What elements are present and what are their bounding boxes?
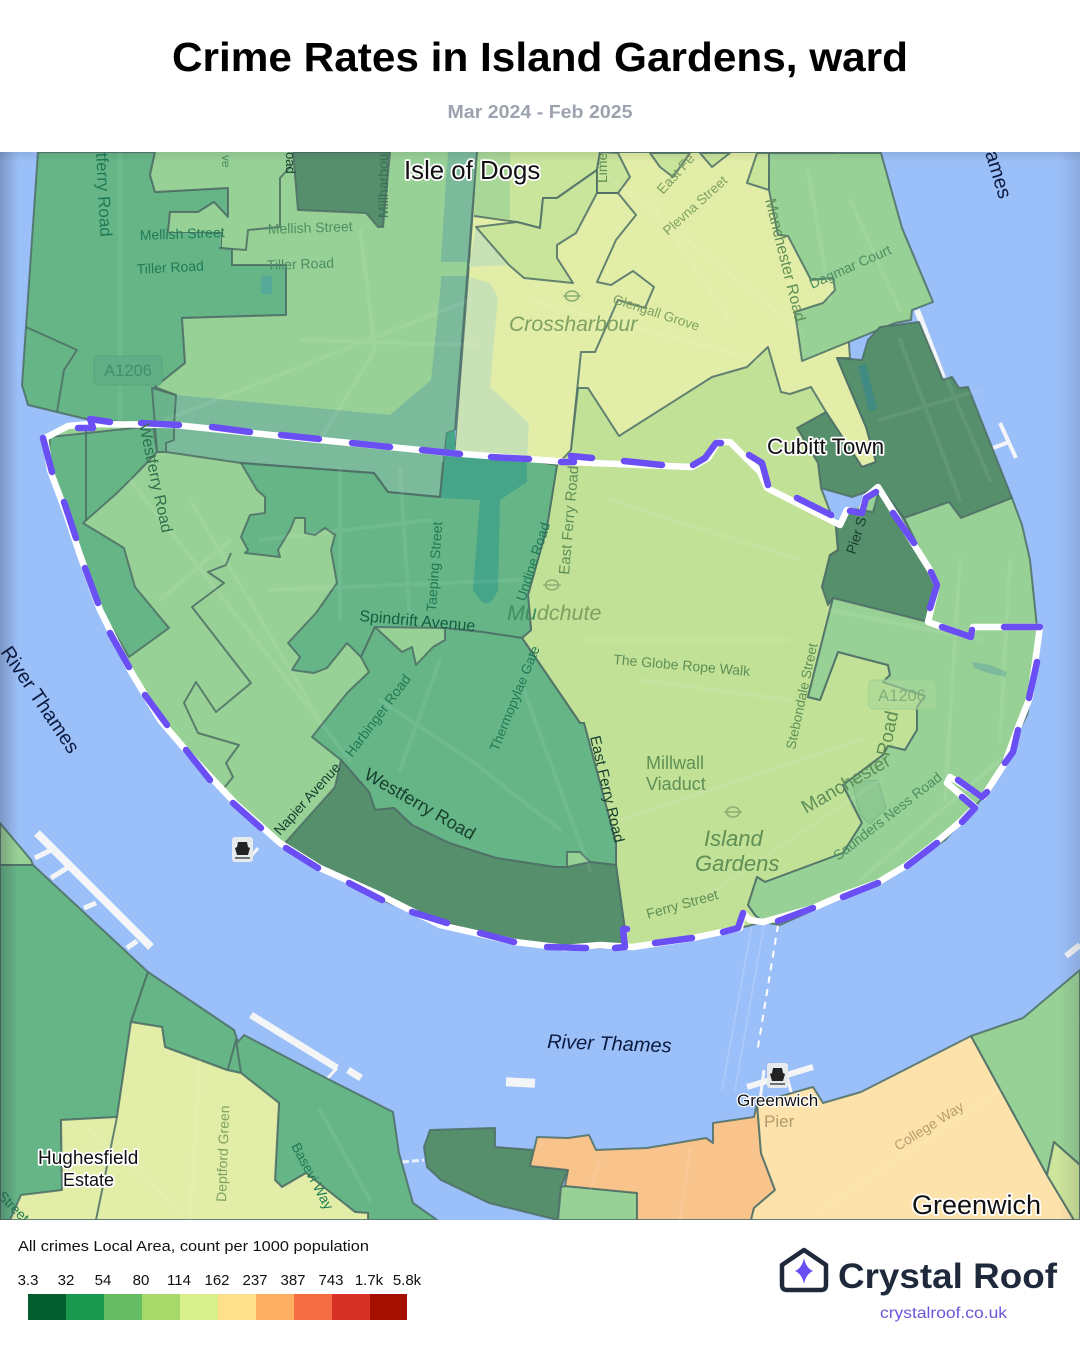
street labels: Dagmar Court bbox=[807, 241, 894, 292]
street labels: Thermopylae Gate bbox=[487, 644, 543, 753]
street labels: Spindrift Avenue bbox=[359, 608, 476, 635]
place labels: Estate bbox=[63, 1170, 114, 1190]
street labels: Stebondale Street bbox=[783, 642, 820, 751]
street labels: Road bbox=[873, 709, 903, 758]
title: Crime Rates in Island Gardens, ward bbox=[172, 34, 908, 80]
road shield A1206 east bbox=[869, 680, 936, 709]
legend value labels: 114 bbox=[167, 1272, 191, 1289]
legend value labels: 80 bbox=[133, 1272, 149, 1289]
south bank: east lime corner bbox=[1047, 1142, 1080, 1220]
choropleth: teal dock band bbox=[175, 152, 476, 449]
choropleth: teal block and canal bbox=[441, 430, 527, 603]
street labels: Basevi Way bbox=[288, 1140, 337, 1212]
street labels: Harbinger Road bbox=[342, 671, 414, 760]
icon: house with star bbox=[782, 1250, 826, 1290]
street labels: College Way bbox=[891, 1098, 966, 1154]
choropleth: teal band south of ward line bbox=[166, 425, 450, 497]
street labels: East Fe bbox=[653, 150, 698, 197]
street labels: Tiller Road bbox=[136, 258, 204, 277]
street labels: Plevna Street bbox=[660, 173, 730, 238]
logo: Crystal Roof bbox=[782, 1250, 1057, 1322]
street labels: Deptford Green bbox=[213, 1105, 232, 1202]
ferry icon west bbox=[232, 837, 253, 862]
eastern park pond bbox=[972, 662, 1007, 677]
place labels: Pier bbox=[764, 1112, 795, 1131]
street labels: Taeping Street bbox=[423, 521, 445, 612]
street labels: Westferry Road bbox=[361, 764, 479, 844]
street labels: Ferry Street bbox=[644, 886, 720, 922]
ward boundary: white underlay bbox=[45, 424, 1040, 948]
road shield A1206 west: A1206 bbox=[104, 362, 152, 380]
place labels bbox=[38, 157, 1041, 1220]
pond bbox=[261, 276, 272, 294]
choropleth: ward core lime bbox=[522, 347, 925, 947]
place labels: Hughesfield bbox=[38, 1148, 138, 1169]
water labels: ames bbox=[980, 148, 1016, 201]
legend bbox=[18, 1238, 422, 1320]
south bank: cream Greenwich bbox=[751, 1036, 1074, 1220]
website: crystalroof.co.uk bbox=[880, 1305, 1008, 1322]
place labels: Greenwich bbox=[737, 1091, 818, 1110]
street labels: Manchester bbox=[798, 750, 895, 818]
legend value labels: 32 bbox=[58, 1272, 74, 1289]
choropleth: lime patches north bbox=[474, 152, 770, 450]
legend value labels: 162 bbox=[204, 1272, 230, 1289]
street labels: East Ferry Road bbox=[556, 465, 583, 575]
street labels: Manchester Road bbox=[761, 197, 808, 324]
west sub-boundaries bbox=[184, 553, 251, 788]
legend value labels bbox=[18, 1272, 422, 1289]
south bank: dark Deptford block bbox=[424, 1128, 568, 1220]
street labels: Napier Avenue bbox=[270, 759, 344, 838]
subtitle: date range: Mar 2024 - Feb 2025 bbox=[448, 101, 632, 122]
legend value labels: 387 bbox=[280, 1272, 306, 1289]
teal stub south of ward line bbox=[155, 426, 174, 452]
choropleth: east light green bbox=[748, 498, 1038, 925]
street labels: The Globe Rope Walk bbox=[613, 651, 752, 679]
water labels bbox=[0, 148, 1016, 1057]
street labels: Millwall bbox=[646, 753, 704, 773]
legend value labels: 1.7k bbox=[355, 1272, 384, 1289]
street labels: Tiller Road bbox=[267, 255, 334, 273]
piers and jetties bbox=[35, 310, 1080, 1162]
road crossing teal band bbox=[441, 262, 467, 276]
street labels: Mudchute bbox=[507, 601, 601, 625]
river water bbox=[0, 152, 1080, 1220]
choropleth: dark block at Pier Street bbox=[822, 487, 937, 622]
choropleth: upper ward mid-green bbox=[241, 460, 557, 673]
road shield A1206 west bbox=[94, 356, 162, 385]
choropleth: west sub-boundary lines bbox=[26, 327, 77, 412]
street labels: Lime bbox=[594, 152, 610, 183]
south bank: yellow lime bbox=[10, 1022, 368, 1220]
legend colour scale bbox=[28, 1294, 407, 1320]
place labels: Isle of Dogs bbox=[404, 157, 540, 185]
choropleth: west mid-green strip bbox=[48, 426, 169, 657]
street labels: Undine Road bbox=[513, 520, 553, 603]
street labels: oad bbox=[283, 152, 298, 174]
south bank: west mid-green bbox=[0, 865, 148, 1220]
choropleth: dark south riverside block bbox=[285, 760, 627, 948]
teal stub at A1206 bbox=[152, 388, 176, 426]
street labels: Westferry Road bbox=[135, 422, 175, 534]
road shield A1206 east: A1206 bbox=[878, 687, 926, 705]
choropleth: west mid-green north of ward bbox=[22, 152, 286, 425]
south bank: orange Greenwich bbox=[530, 1103, 775, 1220]
choropleth: mid-green outlines around light block bbox=[150, 152, 228, 232]
place labels: Cubitt Town bbox=[767, 434, 884, 459]
choropleth: lower ward mid-green bbox=[312, 627, 616, 867]
teal band outline bbox=[166, 430, 455, 497]
street labels: tferry Road bbox=[92, 152, 115, 237]
street labels: Crossharbour bbox=[509, 313, 638, 336]
choropleth: NE dark block bbox=[797, 322, 1012, 518]
legend value labels: 5.8k bbox=[393, 1272, 422, 1289]
street labels: ve bbox=[219, 155, 233, 168]
legend title: All crimes Local Area, count per 1000 population bbox=[18, 1238, 369, 1255]
edge vignette bbox=[0, 152, 1080, 1220]
station symbols bbox=[543, 291, 742, 817]
street labels: Saunders Ness Road bbox=[830, 769, 945, 863]
choropleth: NE light green bbox=[769, 153, 933, 361]
legend value labels: 237 bbox=[242, 1272, 268, 1289]
street labels: Glengall Grove bbox=[611, 292, 701, 334]
street labels: Millharbour bbox=[375, 148, 391, 218]
south bank: light green patch bbox=[558, 1186, 637, 1220]
choropleth: ward base land bbox=[48, 427, 878, 866]
street labels: Island bbox=[704, 826, 763, 851]
south bank: east light green bbox=[971, 970, 1080, 1175]
street labels: East Ferry Road bbox=[586, 734, 627, 844]
street labels: Mellish Street bbox=[140, 224, 225, 243]
legend value labels: 743 bbox=[318, 1272, 344, 1289]
south bank: second mid-green bbox=[131, 972, 437, 1220]
sports pitch outline bbox=[852, 780, 886, 824]
street labels bbox=[0, 148, 966, 1226]
street labels: Viaduct bbox=[646, 774, 706, 794]
choropleth: large light-green north block bbox=[156, 152, 448, 415]
street labels: Mellish Street bbox=[268, 218, 353, 237]
place labels: Greenwich bbox=[912, 1190, 1041, 1220]
ferry icon Greenwich bbox=[767, 1063, 788, 1088]
wordmark: Crystal Roof bbox=[838, 1257, 1057, 1296]
street labels: Gardens bbox=[695, 851, 779, 876]
water labels: River Thames bbox=[547, 1031, 672, 1057]
street labels: Pier S bbox=[843, 515, 870, 556]
legend value labels: 3.3 bbox=[18, 1272, 38, 1289]
NE dock pond bbox=[862, 365, 873, 410]
legend value labels: 54 bbox=[95, 1272, 111, 1289]
choropleth: dark block top bbox=[293, 152, 390, 227]
choropleth: pale wedge beside dock bbox=[455, 227, 529, 460]
ward boundary: purple dashes bbox=[43, 419, 1040, 948]
south bank: light corner bbox=[0, 823, 33, 865]
road network texture bbox=[90, 152, 1010, 1220]
choropleth: yellow band north of ward bbox=[455, 152, 876, 467]
map bbox=[0, 148, 1080, 1226]
